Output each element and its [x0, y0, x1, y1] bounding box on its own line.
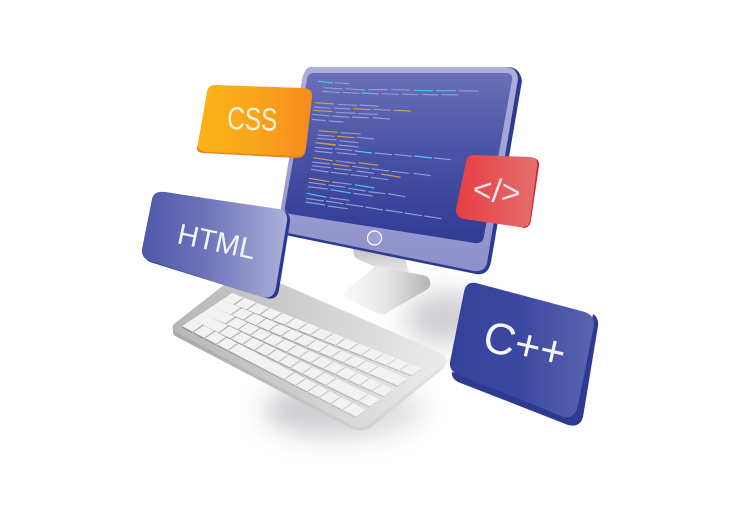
monitor stand — [342, 246, 430, 314]
code tag card edge — [521, 158, 539, 228]
keyboard side edge — [173, 327, 447, 431]
stand neck — [353, 246, 410, 276]
keyboard keys — [182, 293, 422, 417]
code tag card face — [456, 155, 537, 227]
card: code tag — [456, 155, 539, 228]
shadow: keyboard — [265, 383, 425, 437]
stand foot — [342, 266, 430, 314]
card: CSS — [197, 85, 312, 158]
keyboard — [172, 269, 447, 431]
code tag symbol: </> — [471, 170, 522, 211]
CSS label: CSS — [227, 101, 278, 139]
code lines: upper block — [312, 81, 479, 145]
card: C++ — [450, 283, 598, 426]
power button — [368, 231, 382, 245]
monitor screen — [285, 73, 512, 243]
monitor back edge — [283, 67, 522, 274]
monitor bezel — [279, 67, 518, 271]
card: HTML — [142, 192, 290, 299]
HTML card edge — [143, 192, 290, 299]
C++ label: C++ — [479, 312, 571, 378]
code lines — [305, 81, 479, 219]
CSS card face — [198, 85, 312, 156]
monitor — [279, 67, 522, 274]
HTML label: HTML — [175, 219, 258, 266]
C++ card face — [450, 283, 594, 417]
code lines: lower block — [305, 143, 451, 219]
CSS card edge — [197, 143, 306, 158]
keyboard top plate — [172, 269, 446, 428]
shadow: monitor stand — [405, 292, 485, 344]
C++ card edge — [452, 314, 598, 426]
keyboard key shadows — [181, 294, 421, 418]
HTML card face — [142, 192, 287, 298]
